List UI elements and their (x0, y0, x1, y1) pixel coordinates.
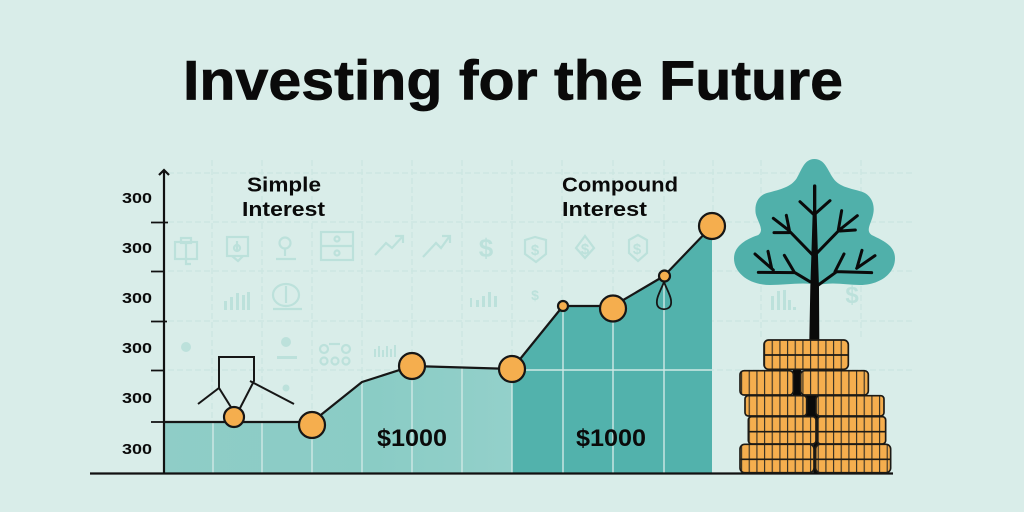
icon: tree (734, 159, 895, 340)
icon: shield dollar two (629, 235, 647, 261)
icon: dollar sign large: $ (479, 233, 494, 263)
heading: compound interest: Interest (562, 199, 647, 221)
funnel marker (198, 357, 294, 412)
icon: coin on stand (276, 238, 296, 259)
title: Investing for the Future (183, 48, 843, 112)
icon: dollar tag (227, 237, 248, 261)
icon: bar chart middle (470, 292, 497, 307)
icon: small dollar: $ (531, 287, 539, 303)
icon: bar chart right (771, 290, 796, 310)
axis ticks (151, 222, 168, 422)
icon: shield dollar one (525, 237, 546, 262)
y axis labels: 300 (122, 240, 152, 257)
coin row 4 (748, 417, 886, 444)
heading: simple interest (242, 174, 325, 221)
icon: small coin (282, 384, 290, 392)
chart (90, 170, 893, 474)
y axis labels (122, 190, 152, 458)
icon: rising arrow one (375, 236, 403, 255)
y axis labels: 300 (122, 390, 152, 407)
drop marker (657, 282, 671, 309)
icon: dollar beside tree: $ (845, 282, 859, 309)
icon: mini bars (374, 345, 396, 357)
data points (224, 213, 725, 438)
faint background icons (175, 232, 647, 364)
white column dividers (213, 276, 712, 473)
icon: rising arrow two (423, 236, 450, 257)
y axis labels: 300 (122, 340, 152, 357)
heading: simple interest: Simple (247, 174, 321, 196)
icon: small pin (281, 337, 291, 347)
y axis labels: 300 (122, 290, 152, 307)
tree branches (755, 186, 875, 285)
area: simple interest (164, 366, 512, 473)
background grid (168, 160, 912, 420)
y axis labels: 300 (122, 441, 152, 458)
coin row 1 (764, 340, 848, 369)
icon: small bar chart (224, 292, 250, 310)
value label: compound: $1000 (576, 425, 646, 452)
faint filled icons (181, 290, 796, 392)
stack gaps (793, 370, 818, 473)
x axis (90, 472, 893, 475)
coin row 5 (740, 444, 891, 473)
icon: ornate dollar (576, 236, 594, 258)
heading: compound interest: Compound (562, 174, 678, 196)
icon: shield dollar glyph: $ (531, 242, 540, 259)
data line (164, 226, 712, 422)
icon: ornate dollar glyph: $ (581, 241, 590, 258)
icon: gears (320, 344, 350, 364)
tree trunk (809, 213, 819, 340)
icon: piggy purse (273, 284, 302, 309)
heading: simple interest: Interest (242, 199, 325, 221)
icon: coin stacks (740, 340, 891, 473)
icon: small dollar left (181, 342, 191, 352)
tree canopy (734, 159, 895, 285)
heading: compound interest (562, 174, 678, 221)
y axis with arrow (159, 170, 169, 473)
y axis labels: 300 (122, 190, 152, 207)
coin row 3 (745, 396, 884, 416)
icon: safe box (175, 238, 197, 264)
icon: banknotes (321, 232, 353, 260)
icon: shield dollar glyph two: $ (633, 241, 642, 258)
value label: simple: $1000 (377, 425, 447, 452)
area: compound interest (512, 226, 712, 473)
coin row 2 (740, 371, 868, 395)
